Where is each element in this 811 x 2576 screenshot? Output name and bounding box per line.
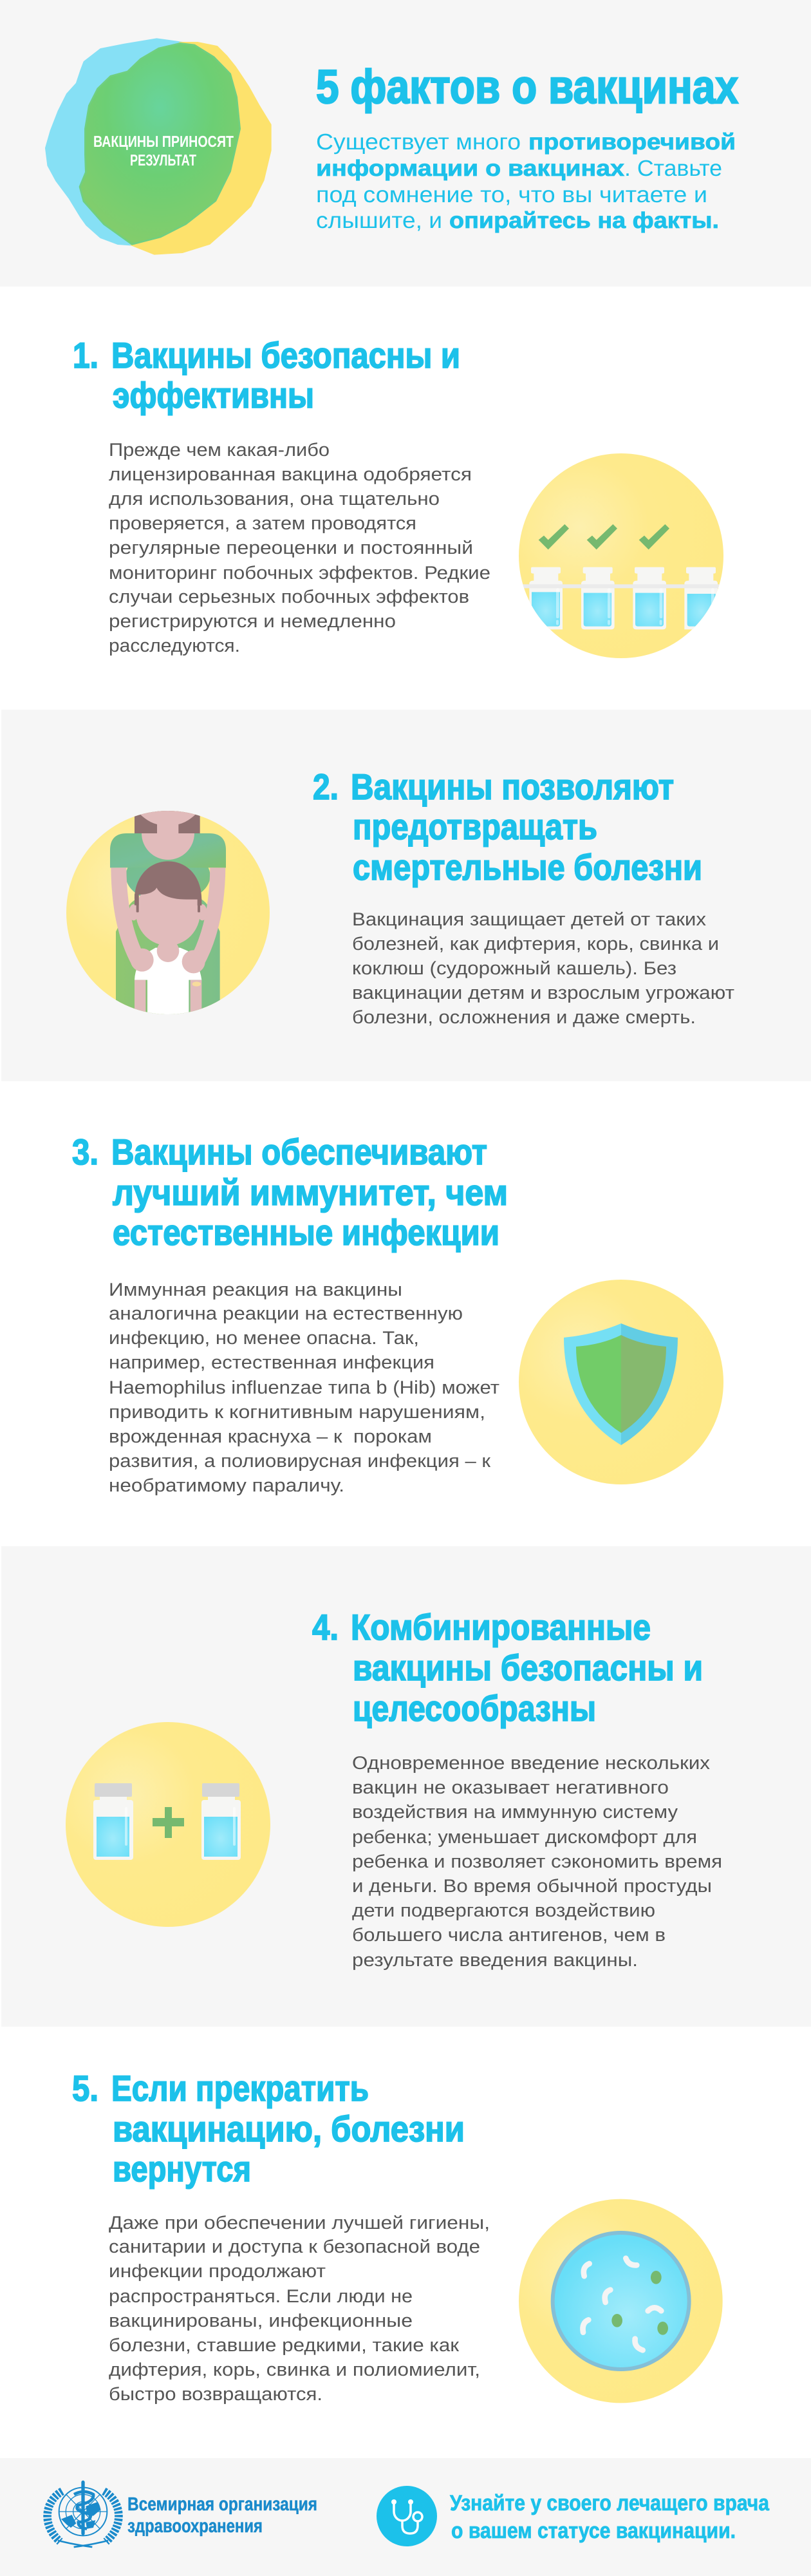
body text: fact 5: распространяться. Если люди не bbox=[109, 2286, 413, 2307]
body text: fact 3: развития, а полиовирусная инфекция – к bbox=[109, 1451, 491, 1472]
body text: fact 4: ребенка и позволяет сэкономить время bbox=[352, 1852, 722, 1872]
intro text: . Ставьте bbox=[624, 156, 722, 181]
panel: header bbox=[0, 0, 811, 287]
logo text: Всемирная организация bbox=[127, 2494, 317, 2515]
intro text: информации о вакцинах bbox=[316, 156, 625, 181]
intro text: под сомнение то, что вы читаете и bbox=[316, 182, 707, 207]
body text: fact 3: инфекцию, но менее опасна. Так, bbox=[109, 1328, 419, 1349]
logo: WHO emblem bbox=[48, 2481, 118, 2547]
right vial bbox=[201, 1783, 241, 1860]
slogan text bbox=[93, 133, 234, 169]
body text: fact 2: Вакцинация защищает детей от таких bbox=[352, 909, 706, 930]
heading: fact 2: предотвращать bbox=[353, 806, 597, 847]
heading: fact 2: Вакцины позволяют bbox=[351, 766, 674, 807]
heading: fact 3: лучший иммунитет, чем bbox=[113, 1172, 508, 1213]
body text: fact 4: воздействия на иммунную систему bbox=[352, 1802, 678, 1823]
body text: fact 1: случаи серьезных побочных эффектов bbox=[109, 587, 469, 607]
heading: fact 2 bbox=[313, 766, 702, 887]
heading: fact 1 bbox=[73, 335, 460, 415]
heading: fact 4: 4. bbox=[312, 1607, 339, 1647]
heading: fact 5: вакцинацию, болезни bbox=[113, 2108, 465, 2149]
heading: fact 4: целесообразны bbox=[353, 1688, 596, 1728]
panel: fact 2 bbox=[1, 710, 811, 1081]
body text: fact 2: вакцинации детям и взрослым угрожают bbox=[352, 983, 734, 1003]
panel: footer bbox=[0, 2458, 811, 2576]
icon: petri dish with germs bbox=[519, 2199, 723, 2403]
slogan text: ВАКЦИНЫ ПРИНОСЯТ bbox=[93, 133, 234, 151]
body text: fact 2: болезни, осложнения и даже смерть. bbox=[352, 1007, 696, 1028]
body text: fact 1: Прежде чем какая-либо bbox=[109, 440, 330, 460]
icon: parent and child bbox=[66, 807, 270, 1016]
heading: fact 4: вакцины безопасны и bbox=[353, 1647, 703, 1688]
icon: two vials with plus bbox=[66, 1722, 270, 1927]
body text: fact 4: и деньги. Во время обычной простуды bbox=[352, 1876, 712, 1897]
heading: fact 3: Вакцины обеспечивают bbox=[111, 1132, 487, 1172]
body text: fact 1: для использования, она тщательно bbox=[109, 489, 440, 509]
logo text: здравоохранения bbox=[127, 2516, 263, 2537]
body text: fact 2: коклюш (судорожный кашель). Без bbox=[352, 958, 676, 979]
body text: fact 4: вакцин не оказывает негативного bbox=[352, 1777, 669, 1798]
body text: fact 1: регулярные переоценки и постоянный bbox=[109, 538, 473, 558]
heading: fact 3: 3. bbox=[72, 1132, 98, 1172]
title: 5 фактов о вакцинах bbox=[316, 60, 738, 113]
icon: vials with check marks bbox=[517, 453, 725, 658]
slogan text: РЕЗУЛЬТАТ bbox=[130, 152, 196, 169]
icon: shield bbox=[519, 1280, 723, 1484]
heading: fact 1: эффективны bbox=[113, 375, 314, 415]
body text: fact 3: необратимому параличу. bbox=[109, 1475, 344, 1496]
left vial bbox=[93, 1783, 133, 1860]
body text: fact 1: лицензированная вакцина одобряется bbox=[109, 464, 472, 485]
logo text bbox=[127, 2494, 317, 2537]
icon: stethoscope bbox=[377, 2486, 437, 2546]
body text: fact 4: большего числа антигенов, чем в bbox=[352, 1925, 666, 1946]
heading: fact 5: Если прекратить bbox=[111, 2068, 369, 2108]
body text: fact 2 bbox=[352, 909, 734, 1028]
body text: fact 5: болезни, ставшие редкими, такие как bbox=[109, 2335, 460, 2356]
body text: fact 3: например, естественная инфекция bbox=[109, 1352, 434, 1373]
heading: fact 1: Вакцины безопасны и bbox=[111, 335, 460, 375]
heading: fact 5: вернутся bbox=[113, 2148, 251, 2189]
heading: fact 4 bbox=[312, 1607, 703, 1728]
panel: fact 3 bbox=[0, 1081, 811, 1546]
panel: fact 1 bbox=[74, 340, 723, 658]
body text: fact 3: Иммунная реакция на вакцины bbox=[109, 1280, 402, 1300]
panel: fact 5 bbox=[0, 2027, 811, 2458]
body text: fact 5: санитарии и доступа к безопасной воде bbox=[109, 2237, 480, 2257]
heading: fact 2: смертельные болезни bbox=[353, 847, 702, 887]
body text: fact 1: регистрируются и немедленно bbox=[109, 611, 396, 632]
call to action text bbox=[450, 2491, 770, 2543]
heading: fact 4: Комбинированные bbox=[351, 1607, 651, 1647]
heading: fact 1: 1. bbox=[73, 335, 98, 375]
body text: fact 4 bbox=[352, 1753, 722, 1971]
body text: fact 5: инфекции продолжают bbox=[109, 2261, 326, 2282]
intro text bbox=[316, 129, 736, 233]
intro text: противоречивой bbox=[528, 129, 736, 155]
heading: fact 5 bbox=[72, 2068, 465, 2189]
body text: fact 4: Одновременное введение нескольких bbox=[352, 1753, 710, 1774]
body text: fact 2: болезней, как дифтерия, корь, свинка и bbox=[352, 934, 719, 954]
plus sign bbox=[153, 1807, 184, 1838]
heading: fact 3 bbox=[72, 1132, 508, 1253]
body text: fact 3: приводить к когнитивным нарушениям, bbox=[109, 1402, 485, 1423]
body text: fact 4: дети подвергаются воздействию bbox=[352, 1900, 655, 1921]
body text: fact 3: врожденная краснуха – к порокам bbox=[109, 1426, 432, 1447]
body text: fact 1: мониторинг побочных эффектов. Редкие bbox=[109, 563, 490, 583]
body text: fact 5 bbox=[109, 2213, 490, 2405]
body text: fact 5: быстро возвращаются. bbox=[109, 2384, 322, 2405]
body text: fact 1: проверяется, а затем проводятся bbox=[109, 513, 416, 534]
body text: fact 1: расследуются. bbox=[109, 636, 240, 656]
intro text: слышите, и bbox=[316, 208, 442, 233]
intro text: Существует много bbox=[316, 129, 521, 155]
intro text: опирайтесь на факты. bbox=[449, 208, 719, 233]
body text: fact 5: дифтерия, корь, свинка и полиомиелит, bbox=[109, 2360, 480, 2380]
call to action text: о вашем статусе вакцинации. bbox=[451, 2519, 736, 2543]
watercolor blob with slogan bbox=[46, 40, 270, 253]
heading: fact 5: 5. bbox=[72, 2068, 98, 2108]
heading: fact 2: 2. bbox=[313, 766, 339, 807]
body text: fact 5: вакцинированы, инфекционные bbox=[109, 2311, 413, 2331]
body text: fact 3 bbox=[109, 1280, 499, 1496]
body text: fact 5: Даже при обеспечении лучшей гигиены, bbox=[109, 2213, 490, 2233]
body text: fact 1 bbox=[109, 440, 490, 656]
body text: fact 3: аналогична реакции на естественную bbox=[109, 1303, 463, 1324]
heading: fact 3: естественные инфекции bbox=[113, 1212, 499, 1253]
body text: fact 3: Haemophilus influenzae типа b (Hib) может bbox=[109, 1378, 499, 1398]
call to action text: Узнайте у своего лечащего врача bbox=[450, 2491, 770, 2515]
body text: fact 4: ребенка; уменьшает дискомфорт для bbox=[352, 1827, 697, 1848]
panel: fact 4 bbox=[1, 1546, 811, 2027]
body text: fact 4: результате введения вакцины. bbox=[352, 1950, 638, 1971]
